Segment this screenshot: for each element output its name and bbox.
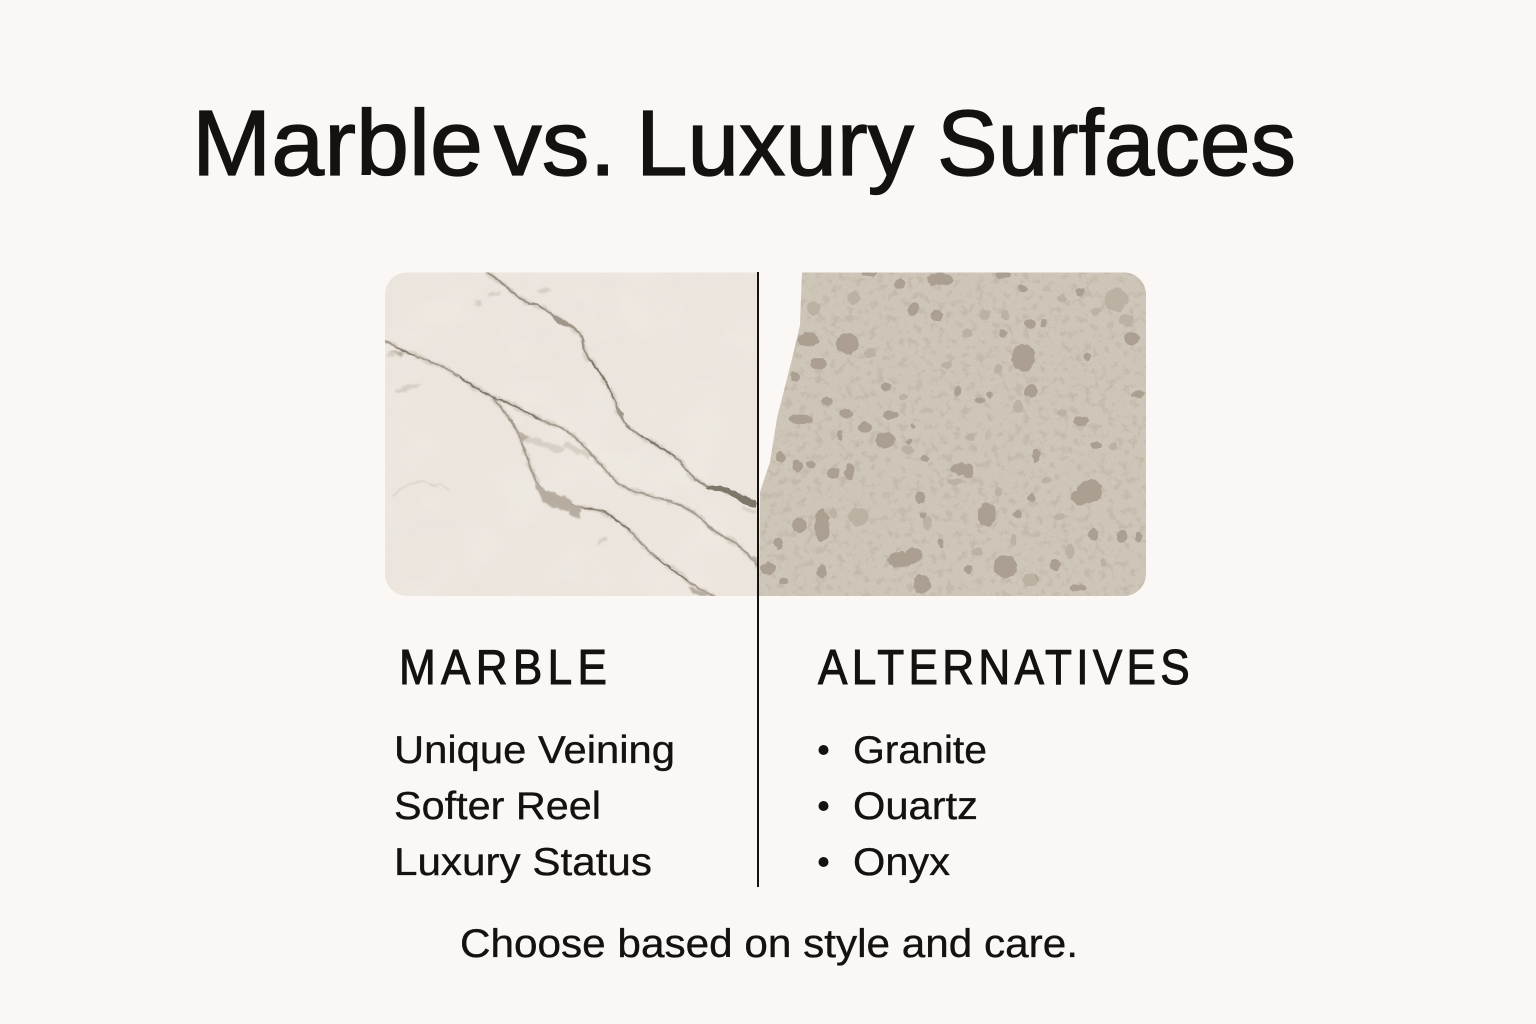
swatch: marble texture [385,272,757,597]
alternatives bullet list: Granite [853,729,987,772]
title: vs. [494,91,616,195]
darker vein sections [396,348,688,582]
title: Surfaces [937,91,1296,195]
alternatives bullet list: Onyx [853,841,951,884]
heading: marble: MARBLE [399,640,607,695]
soft halos [385,272,757,596]
marble qualities list [394,729,675,884]
wide vein patches [552,315,756,508]
marble qualities list: Softer Reel [394,785,601,828]
left column: marble [394,640,675,884]
right column: alternatives [818,640,1190,884]
veins [385,272,757,596]
footer note: Choose based on style and care. [460,922,1078,966]
title: Marble [192,91,483,195]
marble qualities list: Luxury Status [394,841,652,884]
alternatives bullet list [818,729,987,884]
swatch: speckled stone texture [755,272,1147,597]
title: Luxury [636,91,914,195]
marble qualities list: Unique Veining [394,729,675,772]
alternatives bullet list: Ouartz [853,785,978,828]
title [192,91,1296,195]
heading: alternatives: ALTERNATIVES [818,640,1190,695]
vertical divider [757,272,759,887]
panel: material comparison swatches [385,272,1147,597]
